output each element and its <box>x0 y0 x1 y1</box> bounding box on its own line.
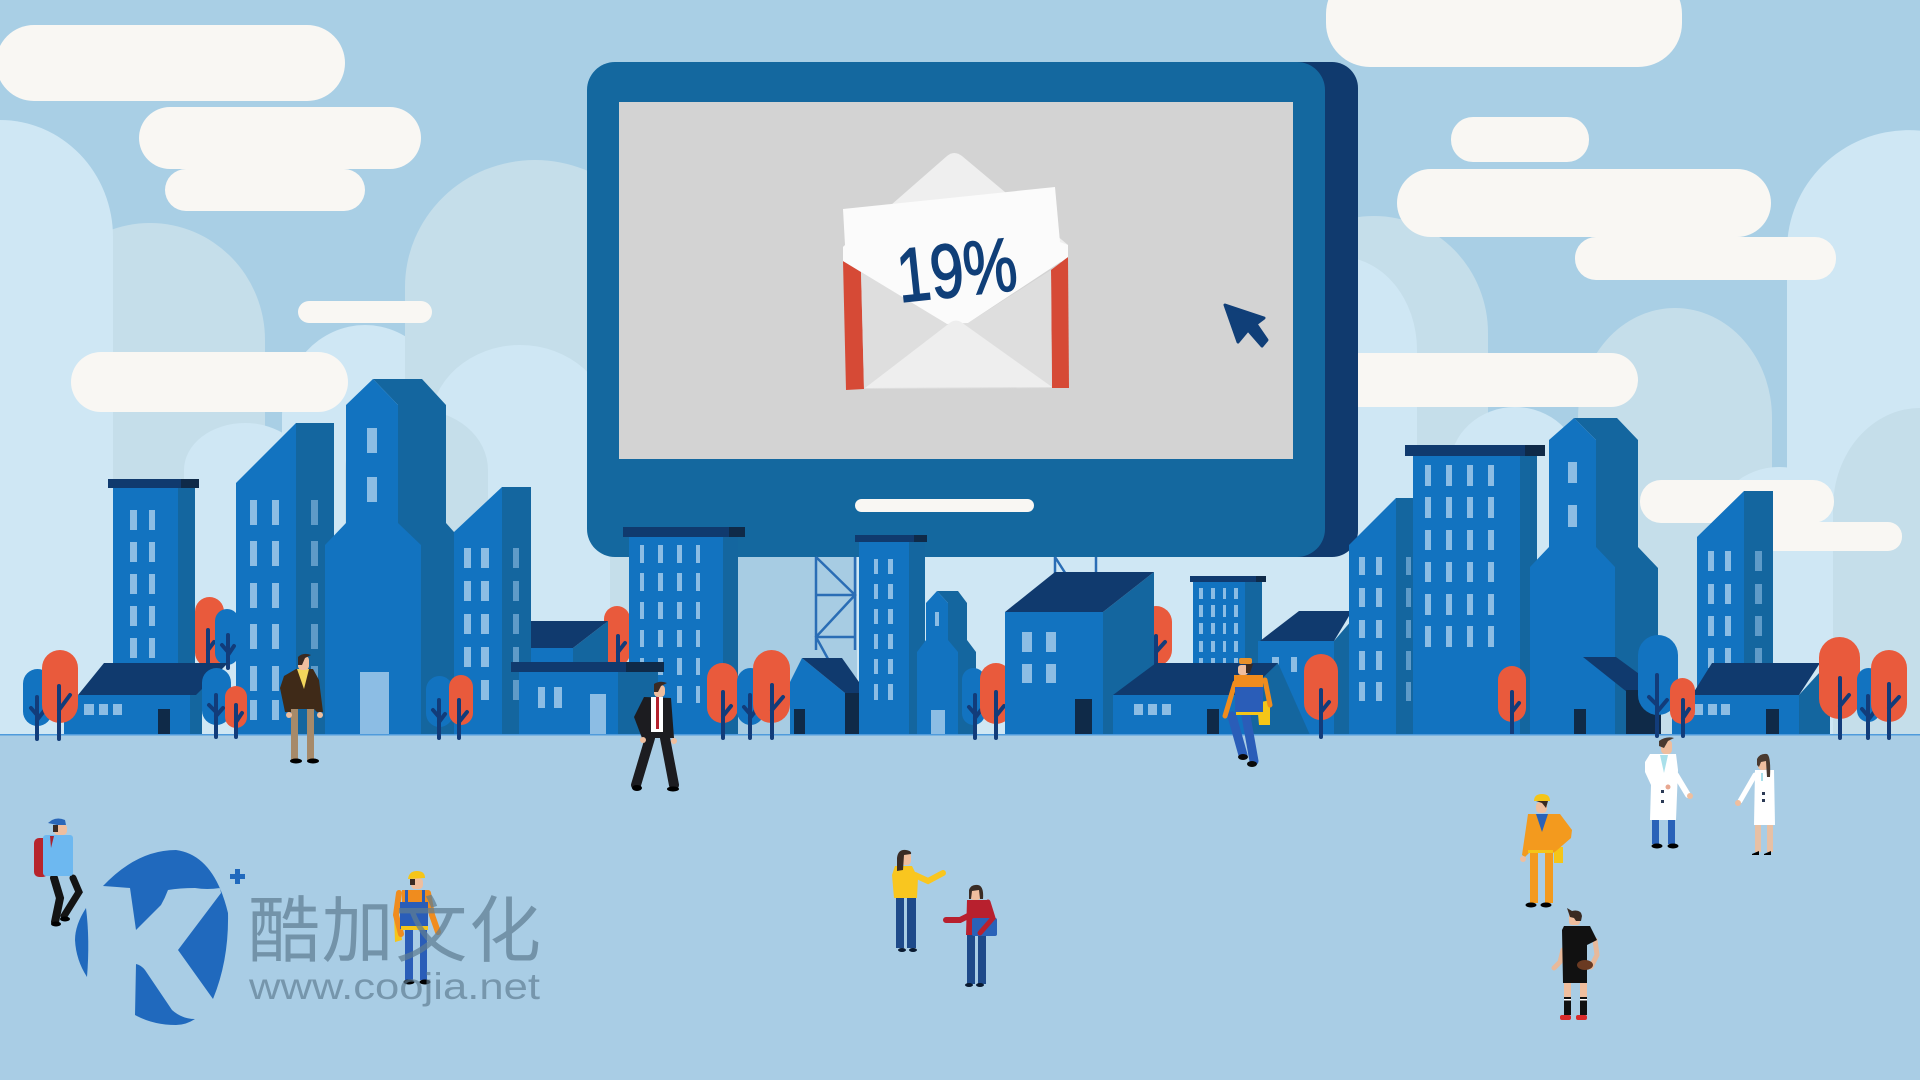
house K <box>1258 611 1352 735</box>
tree orange large <box>753 650 790 738</box>
person: worker in yellow helmet <box>394 871 438 984</box>
envelope inside <box>861 270 1052 389</box>
cursor arrow icon <box>1225 305 1267 346</box>
tower N <box>1530 418 1658 735</box>
letter sheet <box>843 187 1068 324</box>
envelope front flap <box>865 320 1052 388</box>
tower G <box>917 591 976 735</box>
monitor power bar <box>855 499 1034 512</box>
trees by tower E <box>707 663 764 738</box>
house in front of tower N <box>1574 657 1661 735</box>
tree blue back <box>215 609 239 668</box>
watermark url: www.coojia.net <box>248 966 541 1007</box>
tower B <box>236 423 334 735</box>
person: man in black suit <box>632 682 679 792</box>
person: traveller with backpack <box>34 818 79 926</box>
tower F <box>855 535 927 735</box>
trees left front <box>23 650 473 738</box>
ground <box>0 734 1920 1080</box>
city left <box>23 379 1012 738</box>
watermark company name: 酷加文化 <box>248 892 541 972</box>
house left <box>64 663 228 735</box>
tower A <box>108 479 199 735</box>
tower L <box>1349 498 1420 735</box>
trees right <box>1498 635 1907 738</box>
person: woman in red sweater <box>946 885 997 987</box>
trees by tower G <box>962 663 1012 738</box>
tree orange mid <box>604 606 630 666</box>
logo K mark <box>75 850 245 1025</box>
background skyline arches <box>0 120 1920 740</box>
tower O <box>1697 491 1773 735</box>
person: man in brown suit <box>280 654 323 764</box>
monitor screen <box>619 102 1293 459</box>
tower D <box>454 487 531 735</box>
envelope with 19% letter <box>843 153 1069 390</box>
building H <box>1005 572 1154 735</box>
percentage text: 19% <box>893 222 1021 319</box>
city right <box>1005 418 1907 738</box>
upper mid house <box>531 621 608 662</box>
tree orange by house K <box>1304 654 1338 737</box>
person: male doctor <box>1645 737 1693 848</box>
person: worker in orange suit <box>1520 794 1572 908</box>
house P <box>1672 663 1830 735</box>
flat roof house <box>511 662 664 735</box>
clouds <box>0 0 1902 551</box>
monitor back edge <box>1250 62 1358 557</box>
envelope back flap <box>843 153 1068 262</box>
small house <box>790 658 859 735</box>
person: female doctor <box>1735 754 1775 855</box>
house J <box>1113 663 1310 735</box>
person: rugby referee in black <box>1554 908 1597 1020</box>
monitor frame <box>587 62 1325 557</box>
watermark logo <box>75 850 541 1025</box>
tower C <box>325 379 454 735</box>
envelope right red strip <box>1051 257 1069 388</box>
tower E <box>623 527 745 735</box>
truss support <box>816 557 1096 690</box>
tree orange back <box>195 597 224 670</box>
tower I <box>1190 576 1266 682</box>
billboard monitor <box>587 62 1358 557</box>
tree orange behind building <box>1140 606 1172 666</box>
envelope left red strip <box>843 261 864 390</box>
person: woman in yellow sweater <box>892 850 943 952</box>
tower M <box>1405 445 1545 735</box>
person: seated worker <box>1225 658 1270 767</box>
